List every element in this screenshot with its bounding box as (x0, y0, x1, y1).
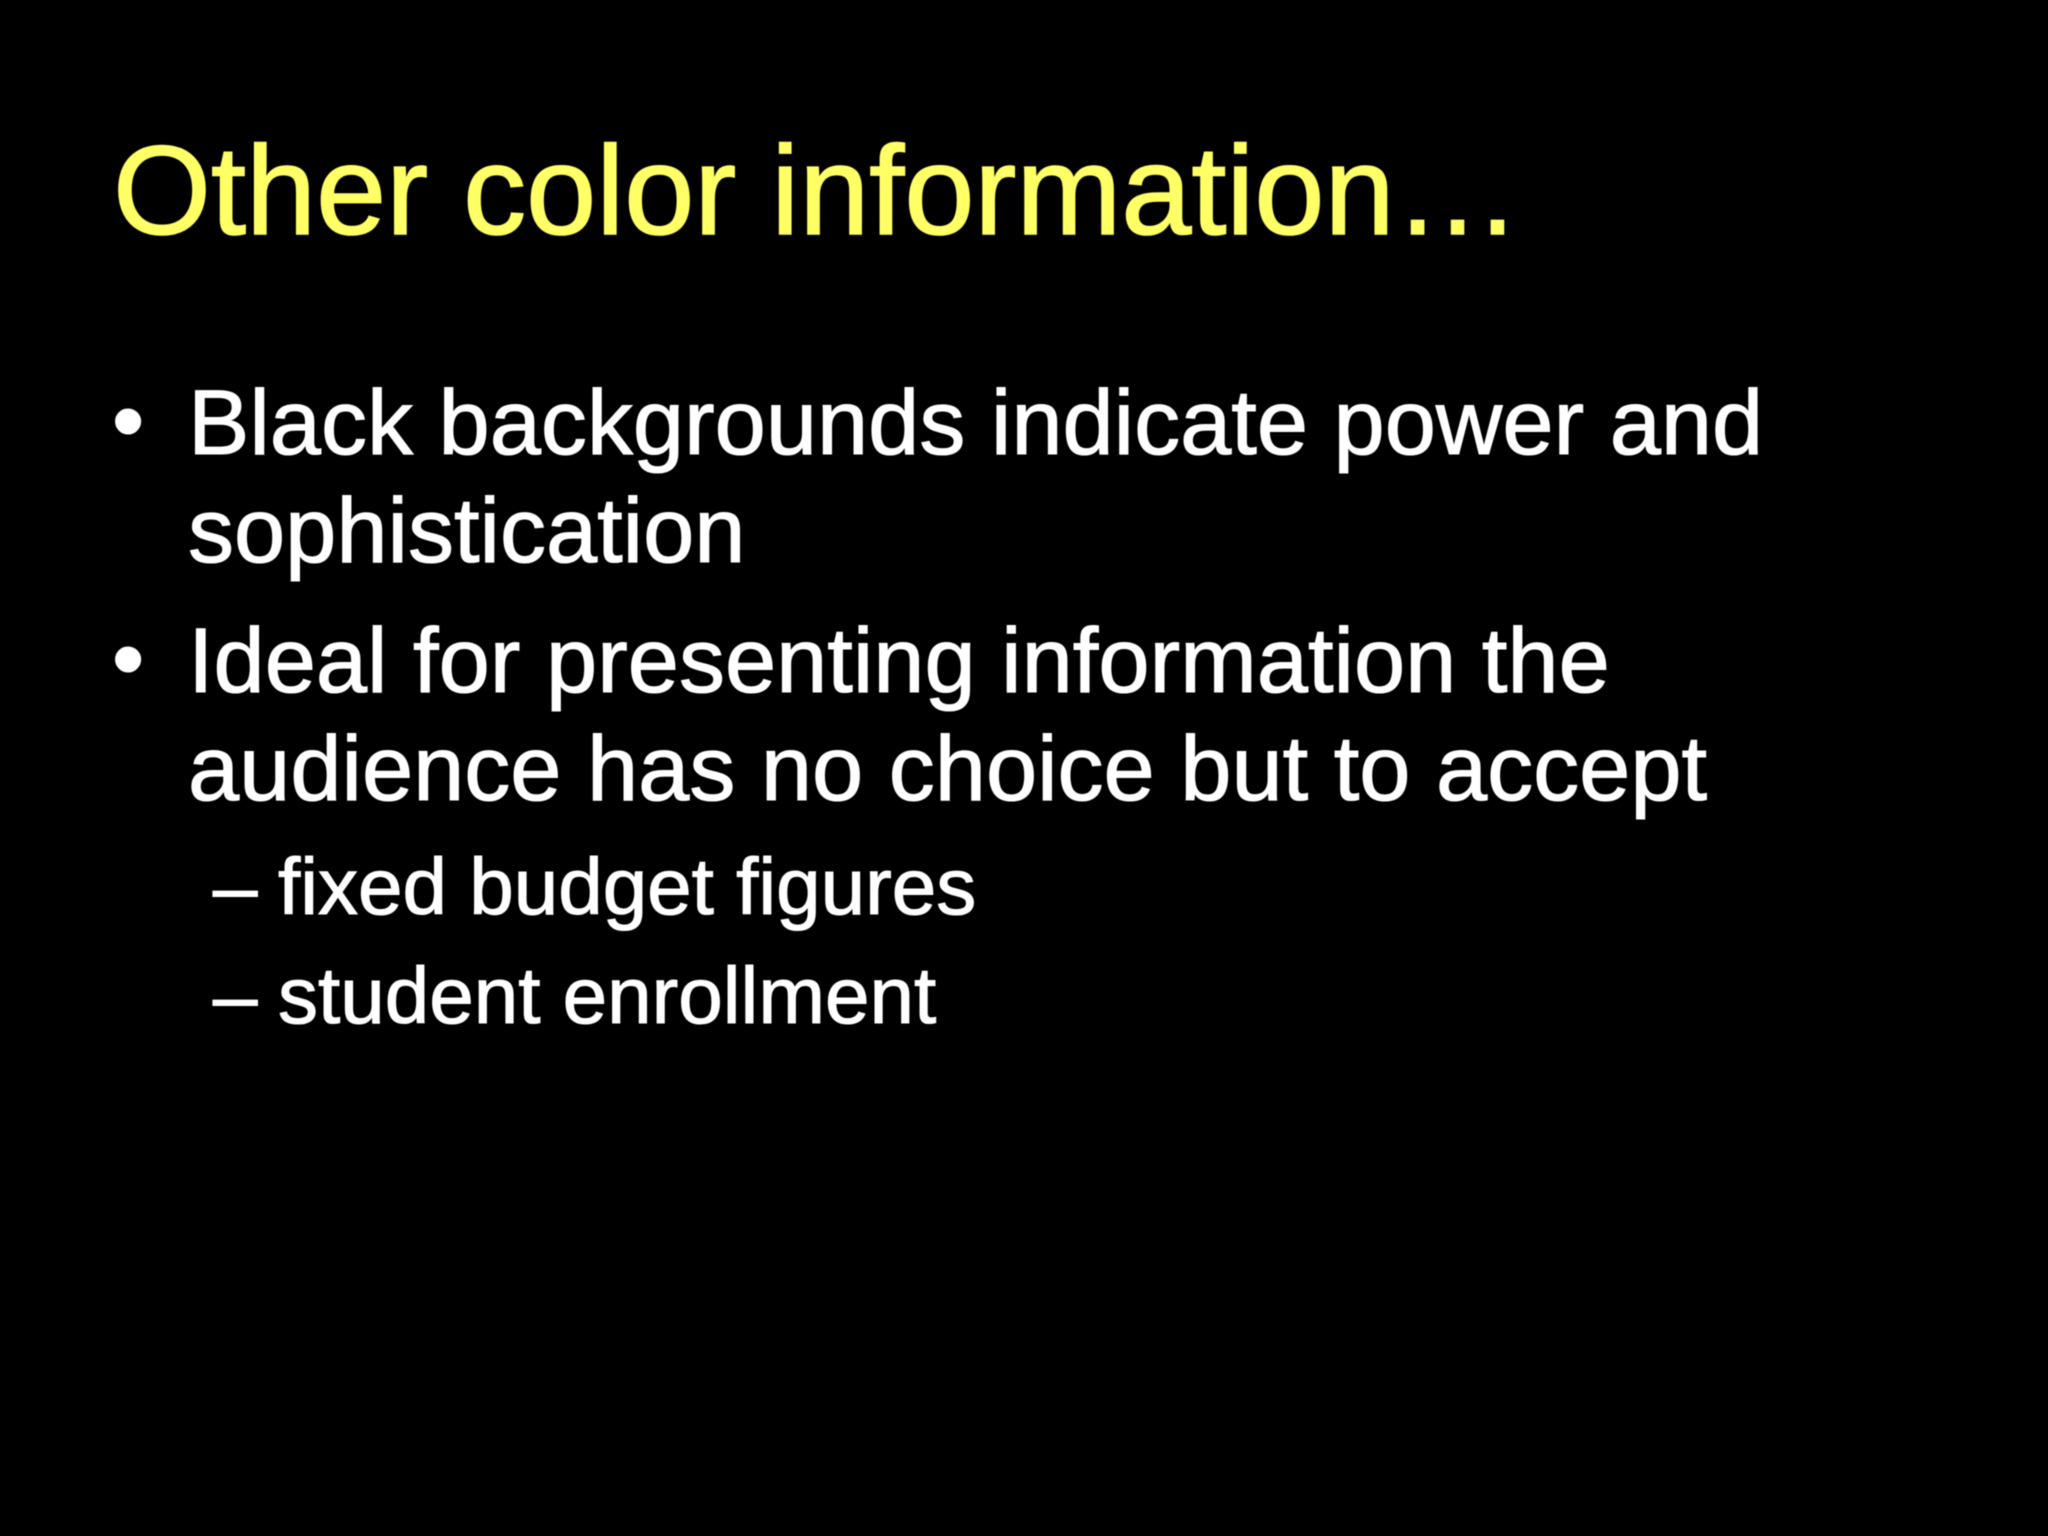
bullet text: black backgrounds: Black backgrounds indicate power and (188, 372, 1763, 474)
bullet marker 1: • (112, 370, 144, 472)
bullet list (112, 370, 1763, 1040)
bullet marker 2: • (112, 608, 144, 710)
title: Other color information… (113, 120, 1521, 261)
bullet text: ideal for presenting (188, 610, 1708, 820)
sub-bullet: student enrollment: student enrollment (278, 951, 936, 1040)
bullet text: ideal for presenting: Ideal for presenting information the (188, 610, 1610, 712)
sub-bullet: student enrollment: – (213, 951, 258, 1040)
bullet text: black backgrounds: sophistication (188, 480, 745, 582)
sub-bullet: fixed budget figures: – (213, 842, 258, 931)
bullet text: ideal for presenting: audience has no choice but to accept (188, 718, 1707, 820)
sub-bullet: fixed budget figures: fixed budget figures (278, 842, 976, 931)
bullet text: black backgrounds (188, 372, 1763, 582)
